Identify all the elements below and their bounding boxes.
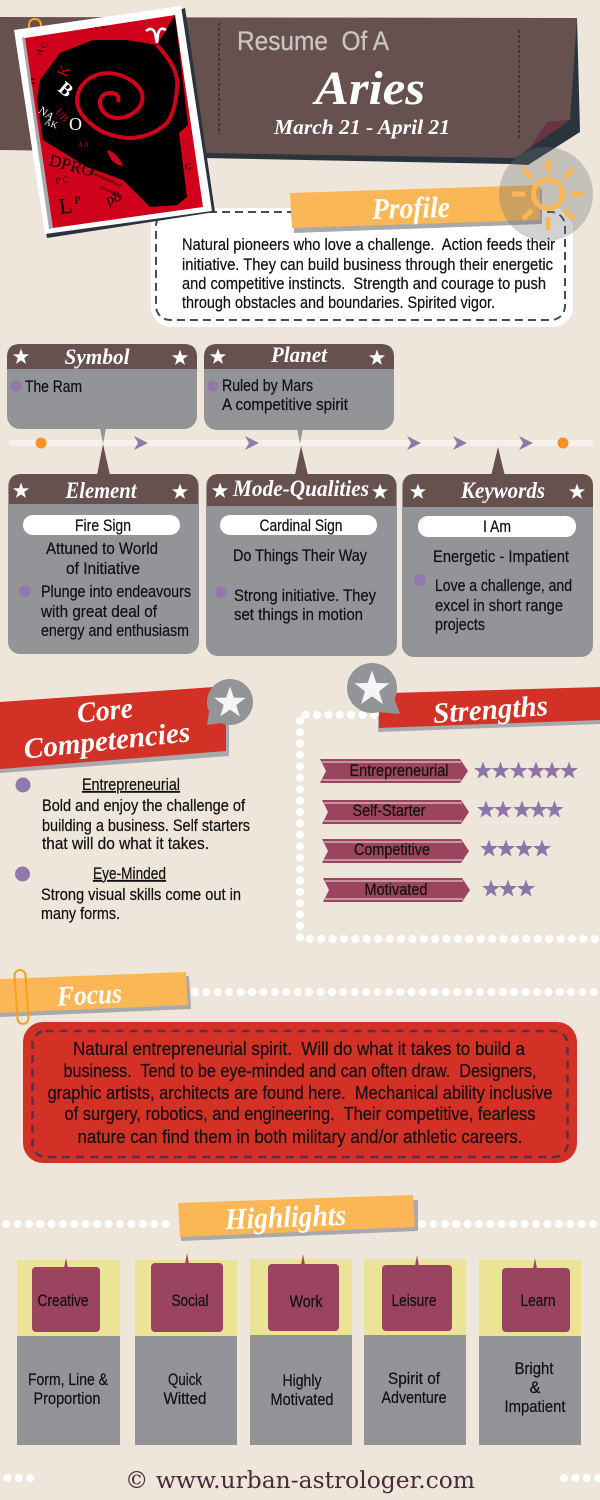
panel: focus (23, 1022, 577, 1163)
panel: element: energy and enthusiasm (41, 622, 189, 640)
heading: element: Element (65, 478, 137, 503)
column: social (135, 1253, 237, 1445)
list: core competencies: many forms. (41, 905, 120, 923)
list: core competencies: that will do what it takes. (42, 835, 209, 853)
list: core competencies: Eye-Minded (93, 865, 166, 883)
photo card: ram artwork: G (185, 162, 192, 172)
header banner (0, 17, 580, 165)
panel: mode-qualities: Strong initiative. They (234, 587, 377, 605)
panel: symbol (7, 344, 197, 444)
panel: strengths (300, 663, 600, 939)
column: learn: & (529, 1379, 541, 1397)
panel: element: with great deal of (40, 603, 157, 621)
column: creative: Proportion (34, 1390, 100, 1408)
ribbon: highlights (6, 1195, 600, 1241)
bar: entrepreneurial: Entrepreneurial (350, 762, 448, 780)
panel: mode-qualities (206, 446, 397, 656)
focus text: Natural entrepreneurial spirit. Will do what it takes to build a (73, 1039, 526, 1059)
paperclip: header (29, 19, 41, 38)
photo card: ram artwork: roparamentumsed (87, 169, 122, 189)
heading: strengths: Strengths (432, 690, 549, 730)
photo card: ram artwork: K (55, 63, 74, 80)
column: leisure (364, 1255, 466, 1445)
panel: mode-qualities: set things in motion (234, 606, 363, 624)
photo card: ram artwork: DPRO (47, 151, 96, 181)
focus text: of surgery, robotics, and engineering. Their competitive, fearless (64, 1104, 536, 1124)
profile text: initiative. They can build business through their energetic (182, 256, 553, 274)
list: core competencies: Bold and enjoy the challenge of (42, 797, 245, 815)
column: learn: Learn (520, 1292, 556, 1310)
heading: keywords: Keywords (460, 478, 545, 503)
bar: self-starter (322, 800, 469, 824)
focus text: business. Tend to be eye-minded and can often draw. Designers, (64, 1061, 536, 1081)
ribbon: profile heading (290, 185, 542, 233)
focus text: graphic artists, architects are found here. Mechanical ability inclusive (48, 1083, 552, 1103)
column: leisure: Adventure (382, 1389, 446, 1407)
profile text: through obstacles and boundaries. Spirited vigor. (182, 294, 495, 312)
bar: self-starter: Self-Starter (352, 802, 426, 820)
panel: keywords: Energetic - Impatient (433, 548, 569, 566)
panel: mode-qualities: Cardinal Sign (260, 517, 342, 535)
photo card: ram artwork: loremipsum (99, 185, 123, 200)
heading: core competencies: Core (75, 692, 135, 730)
date range: March 21 - April 21 (273, 115, 450, 139)
profile text: Natural pioneers who love a challenge. Action feeds their (182, 236, 555, 254)
heading: planet: Planet (270, 342, 328, 367)
column: social: Social (172, 1292, 208, 1310)
bar: competitive (322, 839, 469, 863)
panel: element: Attuned to World (46, 540, 158, 558)
column: work: Motivated (270, 1391, 334, 1409)
rating: self-starter stars (477, 800, 564, 818)
panel: keywords (402, 447, 593, 657)
bar: motivated (323, 878, 470, 902)
column: social: Quick (168, 1371, 203, 1389)
column: creative: Creative (38, 1292, 88, 1310)
rating: entrepreneurial stars (474, 762, 578, 779)
column: work: Work (290, 1293, 323, 1311)
column: leisure: Leisure (392, 1292, 436, 1310)
header kicker: Resume Of A (237, 26, 389, 56)
photo card: ram artwork: O (69, 114, 82, 134)
rating: competitive stars (480, 840, 551, 857)
photo card: ram artwork: p8 (104, 189, 123, 209)
panel: symbol: The Ram (25, 378, 82, 396)
photo card: ram artwork: P (74, 194, 81, 207)
list: core competencies: Strong visual skills come out in (41, 886, 241, 904)
bar: competitive: Competitive (354, 841, 430, 859)
list: core competencies: Entrepreneurial (82, 776, 180, 794)
bar: entrepreneurial (320, 759, 468, 783)
photo card: ram artwork: P C (55, 174, 69, 186)
ribbon: core competencies (0, 679, 253, 773)
panel: element (8, 444, 199, 654)
column: work: Highly (282, 1372, 322, 1390)
focus text: nature can find them in both military and/or athletic careers. (78, 1127, 522, 1147)
panel: mode-qualities: Do Things Their Way (233, 547, 368, 565)
heading: mode-qualities: Mode-Qualities (232, 476, 369, 501)
photo card: ram artwork: UB (53, 107, 70, 125)
ribbon: profile heading: Profile (371, 191, 450, 226)
column: work (250, 1254, 352, 1445)
rating: motivated stars (482, 880, 535, 897)
bar: motivated: Motivated (364, 881, 428, 899)
ribbon: highlights: Highlights (224, 1199, 347, 1236)
panel: element: Fire Sign (75, 517, 131, 535)
panel: profile (151, 185, 573, 327)
panel: planet (204, 342, 394, 444)
panel: keywords: Love a challenge, and (435, 577, 572, 595)
list: core competencies: building a business. Self starters (42, 817, 250, 835)
photo card: ram artwork (14, 6, 215, 238)
focus text (48, 1039, 552, 1147)
panel: element: of Initiative (66, 560, 140, 578)
column: learn: Impatient (504, 1398, 566, 1416)
photo card: ram artwork: H (26, 76, 38, 86)
photo card: ram artwork: AK (43, 116, 59, 130)
panel: element: Plunge into endeavours (41, 583, 191, 601)
panel: keywords: I Am (483, 518, 511, 536)
column: social: Witted (164, 1390, 206, 1408)
panel: keywords: excel in short range (435, 597, 563, 615)
profile text (182, 236, 555, 312)
ribbon: focus: Focus (55, 978, 123, 1013)
panel: keywords: projects (435, 616, 485, 634)
list: core competencies (15, 776, 250, 923)
main title: Aries (312, 62, 425, 115)
panel: planet: Ruled by Mars (222, 377, 313, 395)
profile text: and competitive instincts. Strength and courage to push (182, 275, 546, 293)
panel: planet: A competitive spirit (222, 396, 348, 414)
column: leisure: Spirit of (388, 1370, 440, 1388)
column: learn: Bright (514, 1360, 554, 1378)
timeline (9, 436, 593, 450)
heading: symbol: Symbol (64, 344, 130, 369)
photo card: ram artwork: N C (88, 18, 108, 33)
icon: sun (499, 147, 593, 241)
photo card: ram artwork: A C (33, 40, 50, 57)
photo card: ram artwork: NA (36, 105, 56, 124)
column: creative: Form, Line & (28, 1371, 108, 1389)
photo card: ram artwork: A A (78, 141, 89, 149)
column: learn (479, 1258, 581, 1445)
photo card: ram artwork: B (54, 78, 77, 102)
ribbon: focus (0, 970, 600, 1024)
footer: © www.urban-astrologer.com (125, 1468, 475, 1494)
ribbon: core competencies: Competencies (22, 716, 192, 766)
photo card: ram artwork: L (57, 192, 74, 219)
column: creative (17, 1258, 120, 1445)
